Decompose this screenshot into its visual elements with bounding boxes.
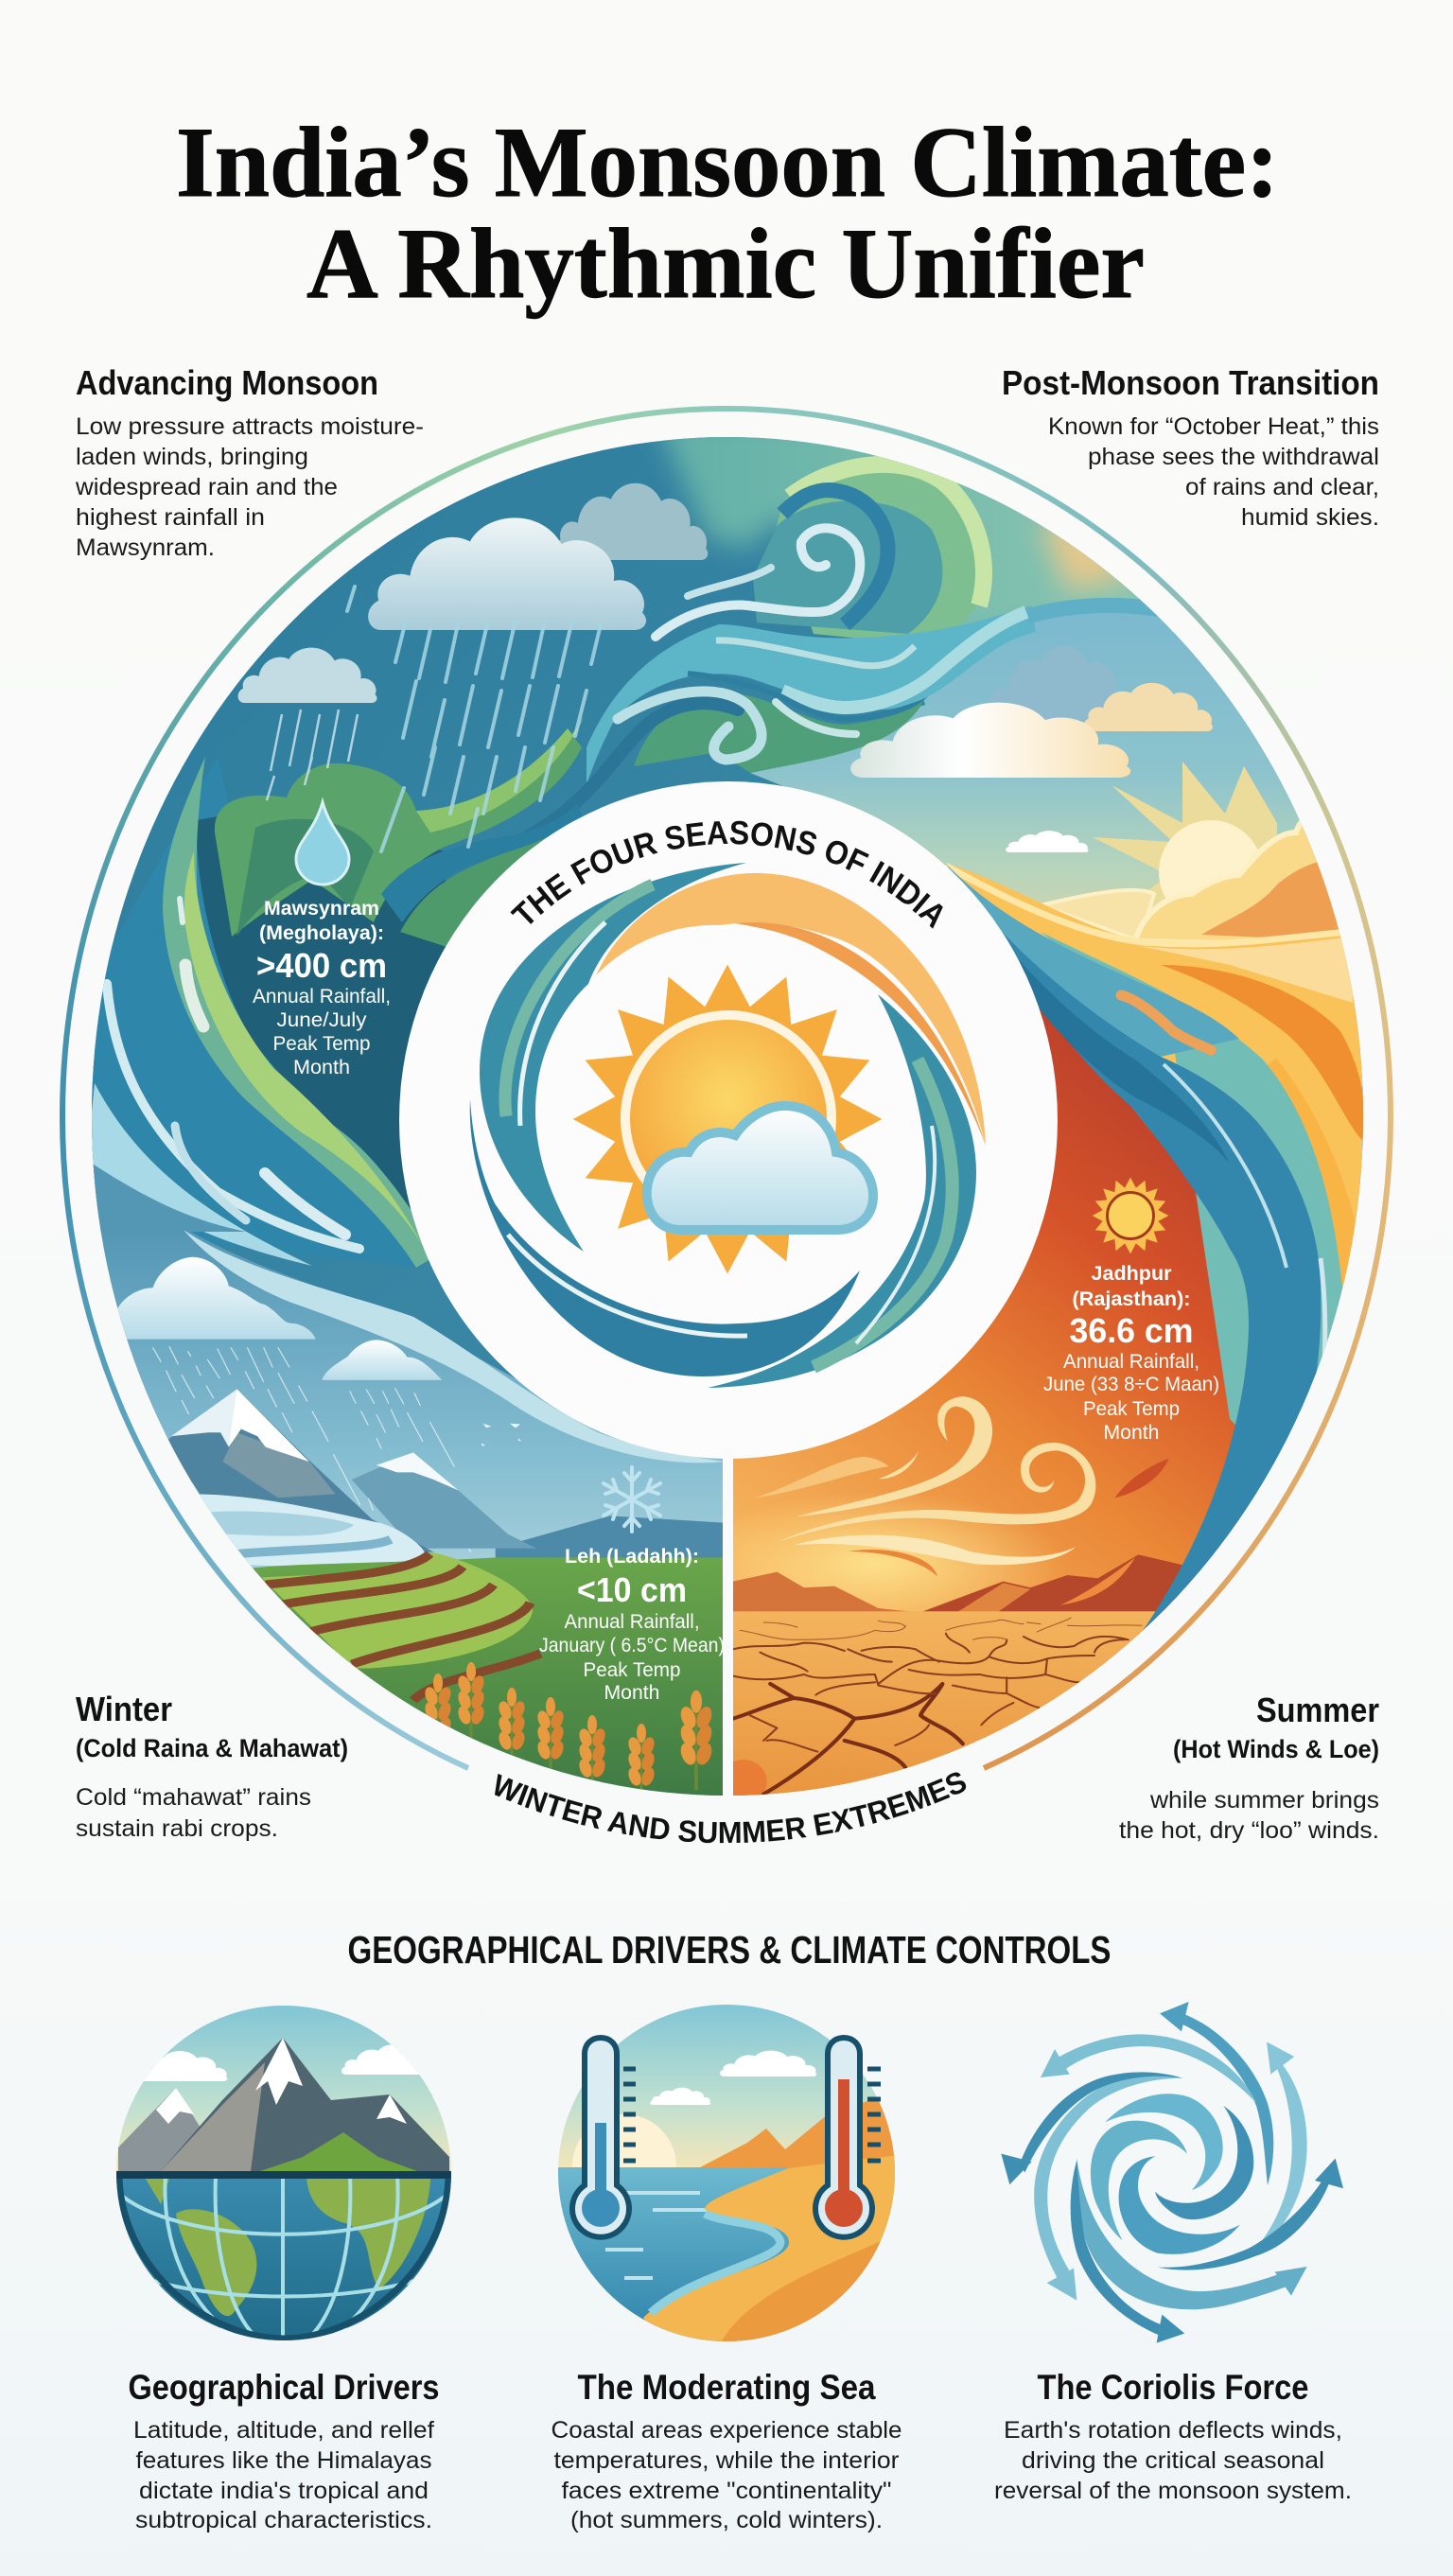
arrow: lower left bbox=[1034, 2075, 1182, 2301]
snowy terrace bbox=[194, 1494, 426, 1566]
pale wind stripe bbox=[184, 1230, 726, 1463]
callout: Leh: Peak Temp bbox=[583, 1659, 681, 1681]
callout: Jadhpur: 36.6 cm bbox=[1069, 1311, 1194, 1350]
clouds upper bbox=[238, 483, 1213, 852]
callout: Jadhpur: Jadhpur bbox=[1092, 1263, 1171, 1285]
icon: central sun bbox=[573, 965, 882, 1273]
heavy rain bbox=[345, 585, 602, 853]
text block: Post-Monsoon Transition: of rains and clear, bbox=[1185, 474, 1379, 500]
panel: winter scene bbox=[85, 1230, 728, 1797]
rice terraces bbox=[261, 1552, 540, 1701]
callout: Jadhpur bbox=[1043, 1263, 1219, 1444]
main mountain bbox=[166, 1389, 434, 1552]
arrow: right bbox=[1157, 2159, 1343, 2270]
callout: Leh: Leh (Ladahh): bbox=[565, 1546, 699, 1568]
heading: geographical drivers: GEOGRAPHICAL DRIVERS & CLIMATE CONTROLS bbox=[348, 1928, 1111, 1971]
left blue ribbons bbox=[85, 757, 426, 1268]
green curl bbox=[753, 459, 987, 643]
green ribbon bbox=[163, 757, 440, 1268]
post-monsoon sky bbox=[750, 612, 1372, 965]
sky blend above winter bbox=[93, 1164, 246, 1232]
hot thermometer bbox=[815, 2038, 881, 2237]
arrow: top bbox=[1160, 2002, 1273, 2185]
curved heading: the four seasons of india: THE FOUR SEASONS OF INDIA bbox=[511, 821, 943, 929]
divider bbox=[723, 1447, 733, 1799]
text block: Post-Monsoon Transition: Post-Monsoon Transition bbox=[1002, 363, 1379, 402]
text block: Geographical Drivers: subtropical characteristics. bbox=[135, 2507, 432, 2533]
callout: Mawsynram: (Megholaya): bbox=[259, 922, 384, 944]
arrow: left bbox=[1001, 2072, 1182, 2184]
panel: yellow and orange flow bbox=[946, 864, 1367, 1476]
callout: Mawsynram: Month bbox=[293, 1057, 350, 1078]
second mountain bbox=[352, 1452, 536, 1549]
text block: Geographical Drivers: Geographical Drivers bbox=[129, 2368, 439, 2407]
callout: Leh: <10 cm bbox=[577, 1570, 687, 1609]
callout: Mawsynram: >400 cm bbox=[256, 946, 387, 985]
text block: Geographical Drivers: features like the Himalayas bbox=[136, 2447, 431, 2474]
text block: Geographical Drivers: Latitude, altitude, and rellef bbox=[133, 2417, 434, 2444]
arrow: upper right bbox=[1249, 2042, 1307, 2258]
icon: snowflake bbox=[604, 1467, 660, 1532]
winter rain bbox=[152, 1346, 471, 1552]
left blue crescent bbox=[480, 863, 746, 1252]
wheat ears bbox=[425, 1662, 711, 1790]
callout: Leh: January ( 6.5°C Mean) bbox=[539, 1635, 725, 1656]
panel: summer scene bbox=[733, 1396, 1201, 1796]
icon: central cloud bbox=[647, 1106, 873, 1230]
text block: Summer: Summer bbox=[1256, 1691, 1379, 1729]
callout: Jadhpur: June (33 8÷C Maan) bbox=[1043, 1374, 1219, 1395]
icon: water drop bbox=[296, 802, 349, 885]
callout: Mawsynram: Mawsynram bbox=[264, 898, 379, 920]
callout: Jadhpur: Month bbox=[1103, 1422, 1160, 1444]
text block: Summer: the hot, dry “loo” winds. bbox=[1119, 1817, 1379, 1844]
panel: advancing monsoon sky bbox=[85, 430, 1372, 1802]
text block: The Coriolis Force: reversal of the monsoon system. bbox=[994, 2478, 1352, 2504]
callout: Mawsynram: Peak Temp bbox=[272, 1033, 371, 1055]
text block: The Moderating Sea bbox=[551, 2368, 902, 2533]
orange crescent bbox=[596, 873, 986, 1146]
panel: summer background bbox=[733, 1008, 1263, 1796]
panel: four seasons circle bbox=[85, 416, 1372, 1807]
text block: Summer: while summer brings bbox=[1149, 1787, 1379, 1814]
sun rays and clouds bbox=[1041, 762, 1362, 946]
callout: Jadhpur: Annual Rainfall, bbox=[1063, 1351, 1199, 1373]
text block: Advancing Monsoon: highest rainfall in bbox=[76, 504, 265, 531]
light rain bbox=[267, 710, 358, 800]
teal and blue ribbon bbox=[946, 864, 1342, 1631]
text block: Post-Monsoon Transition: phase sees the withdrawal bbox=[1088, 444, 1379, 470]
text block: The Coriolis Force: The Coriolis Force bbox=[1037, 2368, 1309, 2407]
text block: Advancing Monsoon: Advancing Monsoon bbox=[76, 363, 378, 402]
text block: Geographical Drivers bbox=[129, 2368, 439, 2533]
text block: Post-Monsoon Transition: Known for “October Heat,” this bbox=[1048, 413, 1379, 440]
text block: Advancing Monsoon: Low pressure attracts moisture- bbox=[76, 413, 424, 440]
green field bbox=[249, 1557, 728, 1797]
icon: coriolis spiral bbox=[1001, 2002, 1343, 2343]
mountains bbox=[733, 1554, 1206, 1613]
warm patch above wave bbox=[1041, 511, 1135, 591]
text block: Summer: (Hot Winds & Loe) bbox=[1173, 1735, 1379, 1763]
dark valley behind Mawsynram bbox=[197, 816, 446, 1209]
icon: small sun bbox=[1093, 1178, 1168, 1253]
text block: The Coriolis Force: Earth's rotation deflects winds, bbox=[1004, 2417, 1342, 2444]
text block: The Moderating Sea: Coastal areas experience stable bbox=[551, 2417, 902, 2444]
curved heading: winter and summer extremes: WINTER AND SUMMER EXTREMES bbox=[495, 1773, 967, 1843]
callout: Jadhpur: (Rajasthan): bbox=[1073, 1288, 1190, 1310]
text block: The Moderating Sea: faces extreme "continentality" bbox=[562, 2478, 891, 2504]
text block: Summer bbox=[1119, 1691, 1379, 1844]
teal upper sky bbox=[655, 437, 1169, 628]
snow specks bbox=[481, 1424, 521, 1446]
callout: Mawsynram: Annual Rainfall, bbox=[253, 986, 391, 1008]
main wind wave bbox=[524, 598, 1158, 832]
pale left streaks bbox=[87, 899, 359, 1266]
winter sky bbox=[85, 1230, 728, 1797]
title bbox=[176, 107, 1279, 319]
outer ring bbox=[62, 409, 1391, 1768]
text block: Post-Monsoon Transition bbox=[1002, 363, 1379, 531]
text block: Winter: Winter bbox=[76, 1690, 172, 1728]
cool thermometer bbox=[572, 2038, 636, 2237]
text block: The Coriolis Force bbox=[994, 2368, 1352, 2504]
text block: Winter bbox=[76, 1690, 348, 1842]
cracked ground bbox=[733, 1611, 1163, 1796]
wind streaks bbox=[755, 1396, 1169, 1577]
callout: Mawsynram: June/July bbox=[276, 1009, 367, 1031]
wind swirl bbox=[656, 528, 860, 637]
text block: The Moderating Sea: temperatures, while the interior bbox=[554, 2447, 899, 2474]
right blue crescent bbox=[708, 994, 976, 1388]
text block: The Moderating Sea: The Moderating Sea bbox=[577, 2368, 876, 2407]
arrow: lower right bbox=[1076, 2159, 1307, 2309]
callout: Mawsynram bbox=[253, 898, 391, 1078]
arrow: upper left bbox=[1041, 2034, 1256, 2103]
icon: sea and thermometers bbox=[553, 2001, 903, 2347]
text block: Winter: Cold “mahawat” rains bbox=[76, 1784, 311, 1811]
text block: The Moderating Sea: (hot summers, cold winters). bbox=[570, 2507, 883, 2533]
spiral core bbox=[1091, 2094, 1253, 2254]
text block: Post-Monsoon Transition: humid skies. bbox=[1241, 504, 1379, 531]
text block: Winter: sustain rabi crops. bbox=[76, 1815, 278, 1842]
bottom blue crescent bbox=[470, 1099, 860, 1376]
center white circle bbox=[399, 781, 1058, 1459]
title: India’s Monsoon Climate: bbox=[176, 107, 1279, 218]
text block: Advancing Monsoon: Mawsynram. bbox=[76, 534, 215, 561]
callout: Jadhpur: Peak Temp bbox=[1083, 1398, 1180, 1420]
callout: Leh: Annual Rainfall, bbox=[564, 1611, 700, 1633]
text block: The Coriolis Force: driving the critical seasonal bbox=[1022, 2447, 1324, 2474]
back ridge bbox=[496, 1516, 723, 1557]
title: A Rhythmic Unifier bbox=[306, 208, 1145, 319]
text block: Advancing Monsoon: laden winds, bringing bbox=[76, 444, 308, 470]
text block: Winter: (Cold Raina & Mahawat) bbox=[76, 1734, 348, 1762]
winter clouds bbox=[116, 1257, 442, 1380]
text block: Advancing Monsoon bbox=[75, 363, 424, 561]
green hill bbox=[215, 728, 586, 955]
icon: mountains and globe bbox=[114, 2001, 454, 2346]
central swirl bbox=[470, 863, 986, 1388]
callout: Leh: Month bbox=[604, 1682, 660, 1704]
text block: Geographical Drivers: dictate india's tropical and bbox=[139, 2478, 429, 2504]
arrow: bottom bbox=[1071, 2160, 1184, 2343]
coastal scene bbox=[553, 2001, 903, 2347]
text block: Advancing Monsoon: widespread rain and the bbox=[75, 474, 338, 500]
callout: Leh bbox=[539, 1546, 725, 1704]
